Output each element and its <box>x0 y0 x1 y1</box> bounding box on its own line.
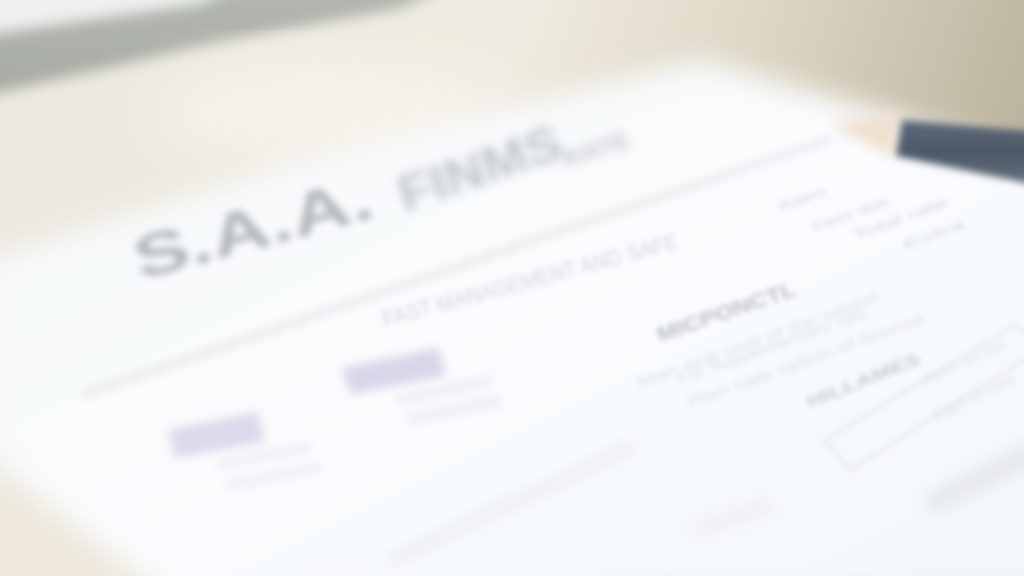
box text: Form on the <box>920 335 1008 388</box>
section body text: For Supplementary rate <box>676 304 869 389</box>
window frame in the top-left background <box>0 0 480 96</box>
subtitle line: FAST MANAGEMENT AND SAFE <box>380 229 681 332</box>
purple label <box>342 348 446 394</box>
left item text <box>215 442 323 490</box>
box text <box>920 335 1018 423</box>
soft light on the desk <box>160 60 500 160</box>
secondary heading: HILLAMES <box>804 349 923 412</box>
purple block: right <box>342 348 503 425</box>
title tail: RATE <box>559 126 633 174</box>
top right small text block <box>776 183 967 253</box>
pencil body <box>896 120 1024 186</box>
section body text <box>636 289 926 412</box>
box text: Sign of rate <box>930 370 1018 423</box>
bottom-left desk corner <box>0 480 130 576</box>
purple block: left <box>168 412 323 490</box>
top right small text block: Extra <box>901 215 967 253</box>
title: FINMS: FINMS <box>390 114 569 222</box>
outlined box at the right <box>825 325 1024 470</box>
bottom text fragments <box>385 440 1024 568</box>
purple label <box>168 412 265 458</box>
section body text: Man and cost of the sound <box>636 289 881 392</box>
section body text: Plan safe option of license <box>686 310 926 412</box>
pencil tip <box>830 110 900 158</box>
right item text <box>395 375 503 425</box>
document title <box>126 114 633 293</box>
top right small text block: Fees due <box>811 192 891 235</box>
top right small text block: Rates <box>776 183 828 215</box>
title: S.A.A.: S.A.A. <box>126 164 380 293</box>
rule under title <box>80 135 834 400</box>
pencil <box>830 110 1024 186</box>
top right small text block: Total rate <box>851 193 950 243</box>
section heading: proposal: MICPONCTL <box>654 279 799 347</box>
